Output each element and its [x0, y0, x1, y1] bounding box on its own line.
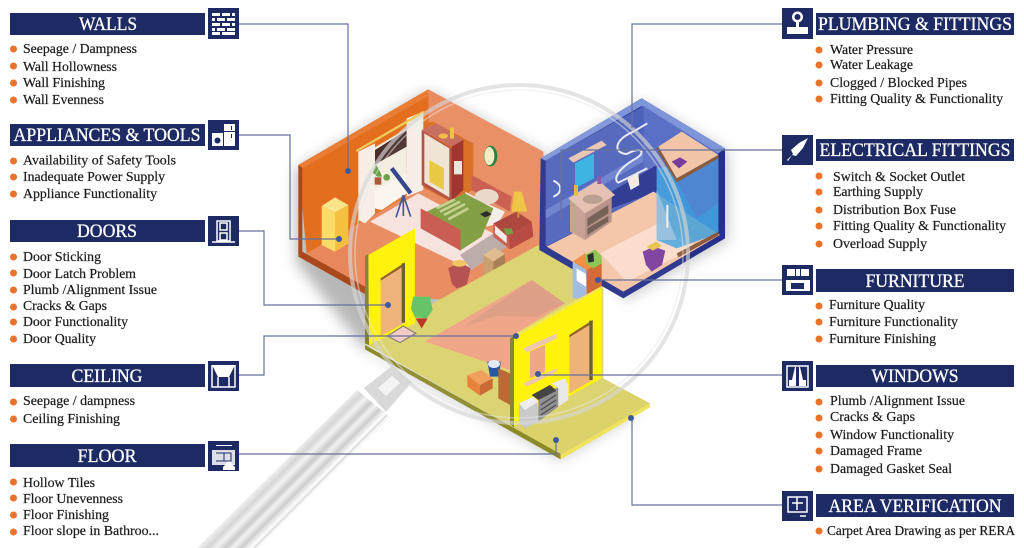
- panel: plumbing and fittings: Clogged / Blocked Pipes: [830, 75, 967, 90]
- illustration: lower floor: [365, 245, 650, 459]
- clock: [484, 146, 497, 166]
- window and curtains: [356, 111, 424, 223]
- panel: furniture: Furniture Finishing: [829, 331, 936, 346]
- heading: plumbing and fittings: PLUMBING & FITTINGS: [818, 14, 1012, 35]
- connector: area verification: [628, 415, 782, 505]
- panel: floor: [10, 441, 239, 538]
- icon: door: [208, 216, 239, 246]
- heading: ceiling: CEILING: [72, 366, 143, 387]
- panel: floor: Floor slope in Bathroo...: [23, 523, 159, 538]
- panel: ceiling: [10, 361, 239, 426]
- panel: electrical fittings: Switch & Socket Outlet: [833, 169, 965, 184]
- panel: doors: Plumb /Alignment Issue: [23, 282, 157, 297]
- magnifying glass lens: [350, 85, 688, 423]
- connector: plumbing: [632, 24, 782, 128]
- heading: area verification: AREA VERIFICATION: [828, 496, 1002, 517]
- panel: doors: Door Latch Problem: [23, 266, 136, 281]
- telescope: [392, 168, 411, 217]
- heading: electrical fittings: ELECTRICAL FITTINGS: [820, 140, 1010, 161]
- connector: doors: [239, 231, 391, 308]
- panel: windows: Damaged Frame: [830, 443, 922, 458]
- icon: window curtains: [782, 361, 813, 391]
- icon: cabinets: [782, 265, 813, 295]
- heading: walls: WALLS: [79, 14, 137, 35]
- panel: floor: Floor Finishing: [23, 507, 109, 522]
- potted plant: [411, 297, 433, 328]
- kiosk: [573, 249, 602, 298]
- panel: walls: [10, 8, 239, 107]
- illustration: yellow walls and furniture: [365, 228, 602, 428]
- panel: appliances and tools: Inadequate Power Supply: [23, 169, 165, 184]
- heading: appliances and tools: APPLIANCES & TOOLS: [14, 125, 200, 146]
- kitchen units: [519, 378, 568, 428]
- boxes, bucket and cabinet: [467, 360, 510, 405]
- connector: ceiling: [239, 333, 519, 375]
- panel: walls: Wall Hollowness: [23, 59, 117, 74]
- panel: electrical fittings: Fitting Quality & Functionality: [833, 218, 1006, 233]
- panel: walls: Seepage / Dampness: [23, 41, 137, 56]
- icon: bricks: [208, 8, 239, 39]
- connector: electrical: [561, 150, 782, 220]
- purple bin: [643, 242, 665, 272]
- icon: floor plan: [208, 441, 239, 471]
- panel: doors: [10, 216, 239, 346]
- panel: appliances and tools: Appliance Functionality: [23, 186, 157, 201]
- icon: plug: [782, 135, 813, 165]
- panel: area verification: [782, 491, 1015, 538]
- panel: electrical fittings: [782, 135, 1014, 251]
- magnifying glass handle: [197, 366, 412, 548]
- panel: windows: [782, 361, 1014, 476]
- panel: floor: Hollow Tiles: [23, 475, 95, 490]
- panel: electrical fittings: Overload Supply: [833, 236, 927, 251]
- panel: floor: Floor Unevenness: [23, 491, 123, 506]
- panel: doors: Door Functionality: [23, 314, 128, 329]
- heading: furniture: FURNITURE: [866, 271, 964, 292]
- icon: fridge and washer: [208, 120, 239, 150]
- illustration: bathroom: [539, 98, 725, 298]
- shower: [657, 132, 718, 257]
- panel: plumbing and fittings: Fitting Quality & Functionality: [830, 91, 1003, 106]
- mirror: [568, 141, 607, 188]
- door mat: [388, 326, 416, 343]
- towel rails: [553, 123, 647, 197]
- front wall left: [365, 228, 415, 345]
- heading: doors: DOORS: [77, 221, 137, 242]
- panel: windows: Plumb /Alignment Issue: [830, 393, 965, 408]
- bin and box: [448, 248, 505, 288]
- kitchen window: [523, 333, 557, 387]
- panel: windows: Cracks & Gaps: [830, 409, 915, 424]
- panel: furniture: Furniture Quality: [829, 297, 925, 312]
- rug: [370, 193, 512, 270]
- panel: furniture: Furniture Functionality: [829, 314, 958, 329]
- connector: appliances: [239, 135, 342, 242]
- front wall right: [510, 286, 602, 427]
- panel: windows: Damaged Gasket Seal: [830, 461, 952, 476]
- panel: plumbing and fittings: [782, 8, 1014, 106]
- panel: electrical fittings: Distribution Box Fuse: [833, 202, 956, 217]
- panel: doors: Door Sticking: [23, 249, 101, 264]
- house shadow: [296, 92, 728, 460]
- vanity: [568, 176, 615, 240]
- connector: furniture: [595, 277, 782, 283]
- panel: area verification: Carpet Area Drawing as per RERA: [827, 523, 1015, 538]
- bedside table and lamp: [493, 192, 533, 249]
- panel: plumbing and fittings: Water Pressure: [830, 42, 913, 57]
- heading: floor: FLOOR: [78, 446, 137, 467]
- icon: area plan: [782, 491, 813, 521]
- panel: ceiling: Seepage / dampness: [23, 393, 135, 408]
- panel: walls: Wall Finishing: [23, 75, 105, 90]
- icon: ceiling: [208, 361, 239, 391]
- bed: [421, 175, 512, 251]
- panel: doors: Cracks & Gaps: [23, 298, 107, 313]
- fridge: [322, 197, 348, 252]
- panel: appliances and tools: Availability of Safety Tools: [23, 152, 176, 168]
- panel: windows: Window Functionality: [830, 427, 954, 442]
- connector: walls: [239, 24, 351, 174]
- panel: electrical fittings: Earthing Supply: [833, 184, 923, 199]
- heading: windows: WINDOWS: [872, 366, 958, 387]
- connector: floor: [239, 437, 559, 454]
- carpet: [425, 280, 565, 370]
- panel: appliances and tools: [10, 120, 239, 201]
- panel: ceiling: Ceiling Finishing: [23, 411, 120, 426]
- illustration: bedroom: [298, 89, 547, 300]
- panel: furniture: [782, 265, 1014, 346]
- panel: doors: Door Quality: [23, 331, 96, 346]
- panel: walls: Wall Evenness: [23, 92, 104, 107]
- panel: plumbing and fittings: Water Leakage: [830, 57, 913, 72]
- connector: windows: [535, 371, 782, 377]
- wardrobe: [422, 123, 463, 202]
- icon: pressure gauge: [782, 8, 813, 39]
